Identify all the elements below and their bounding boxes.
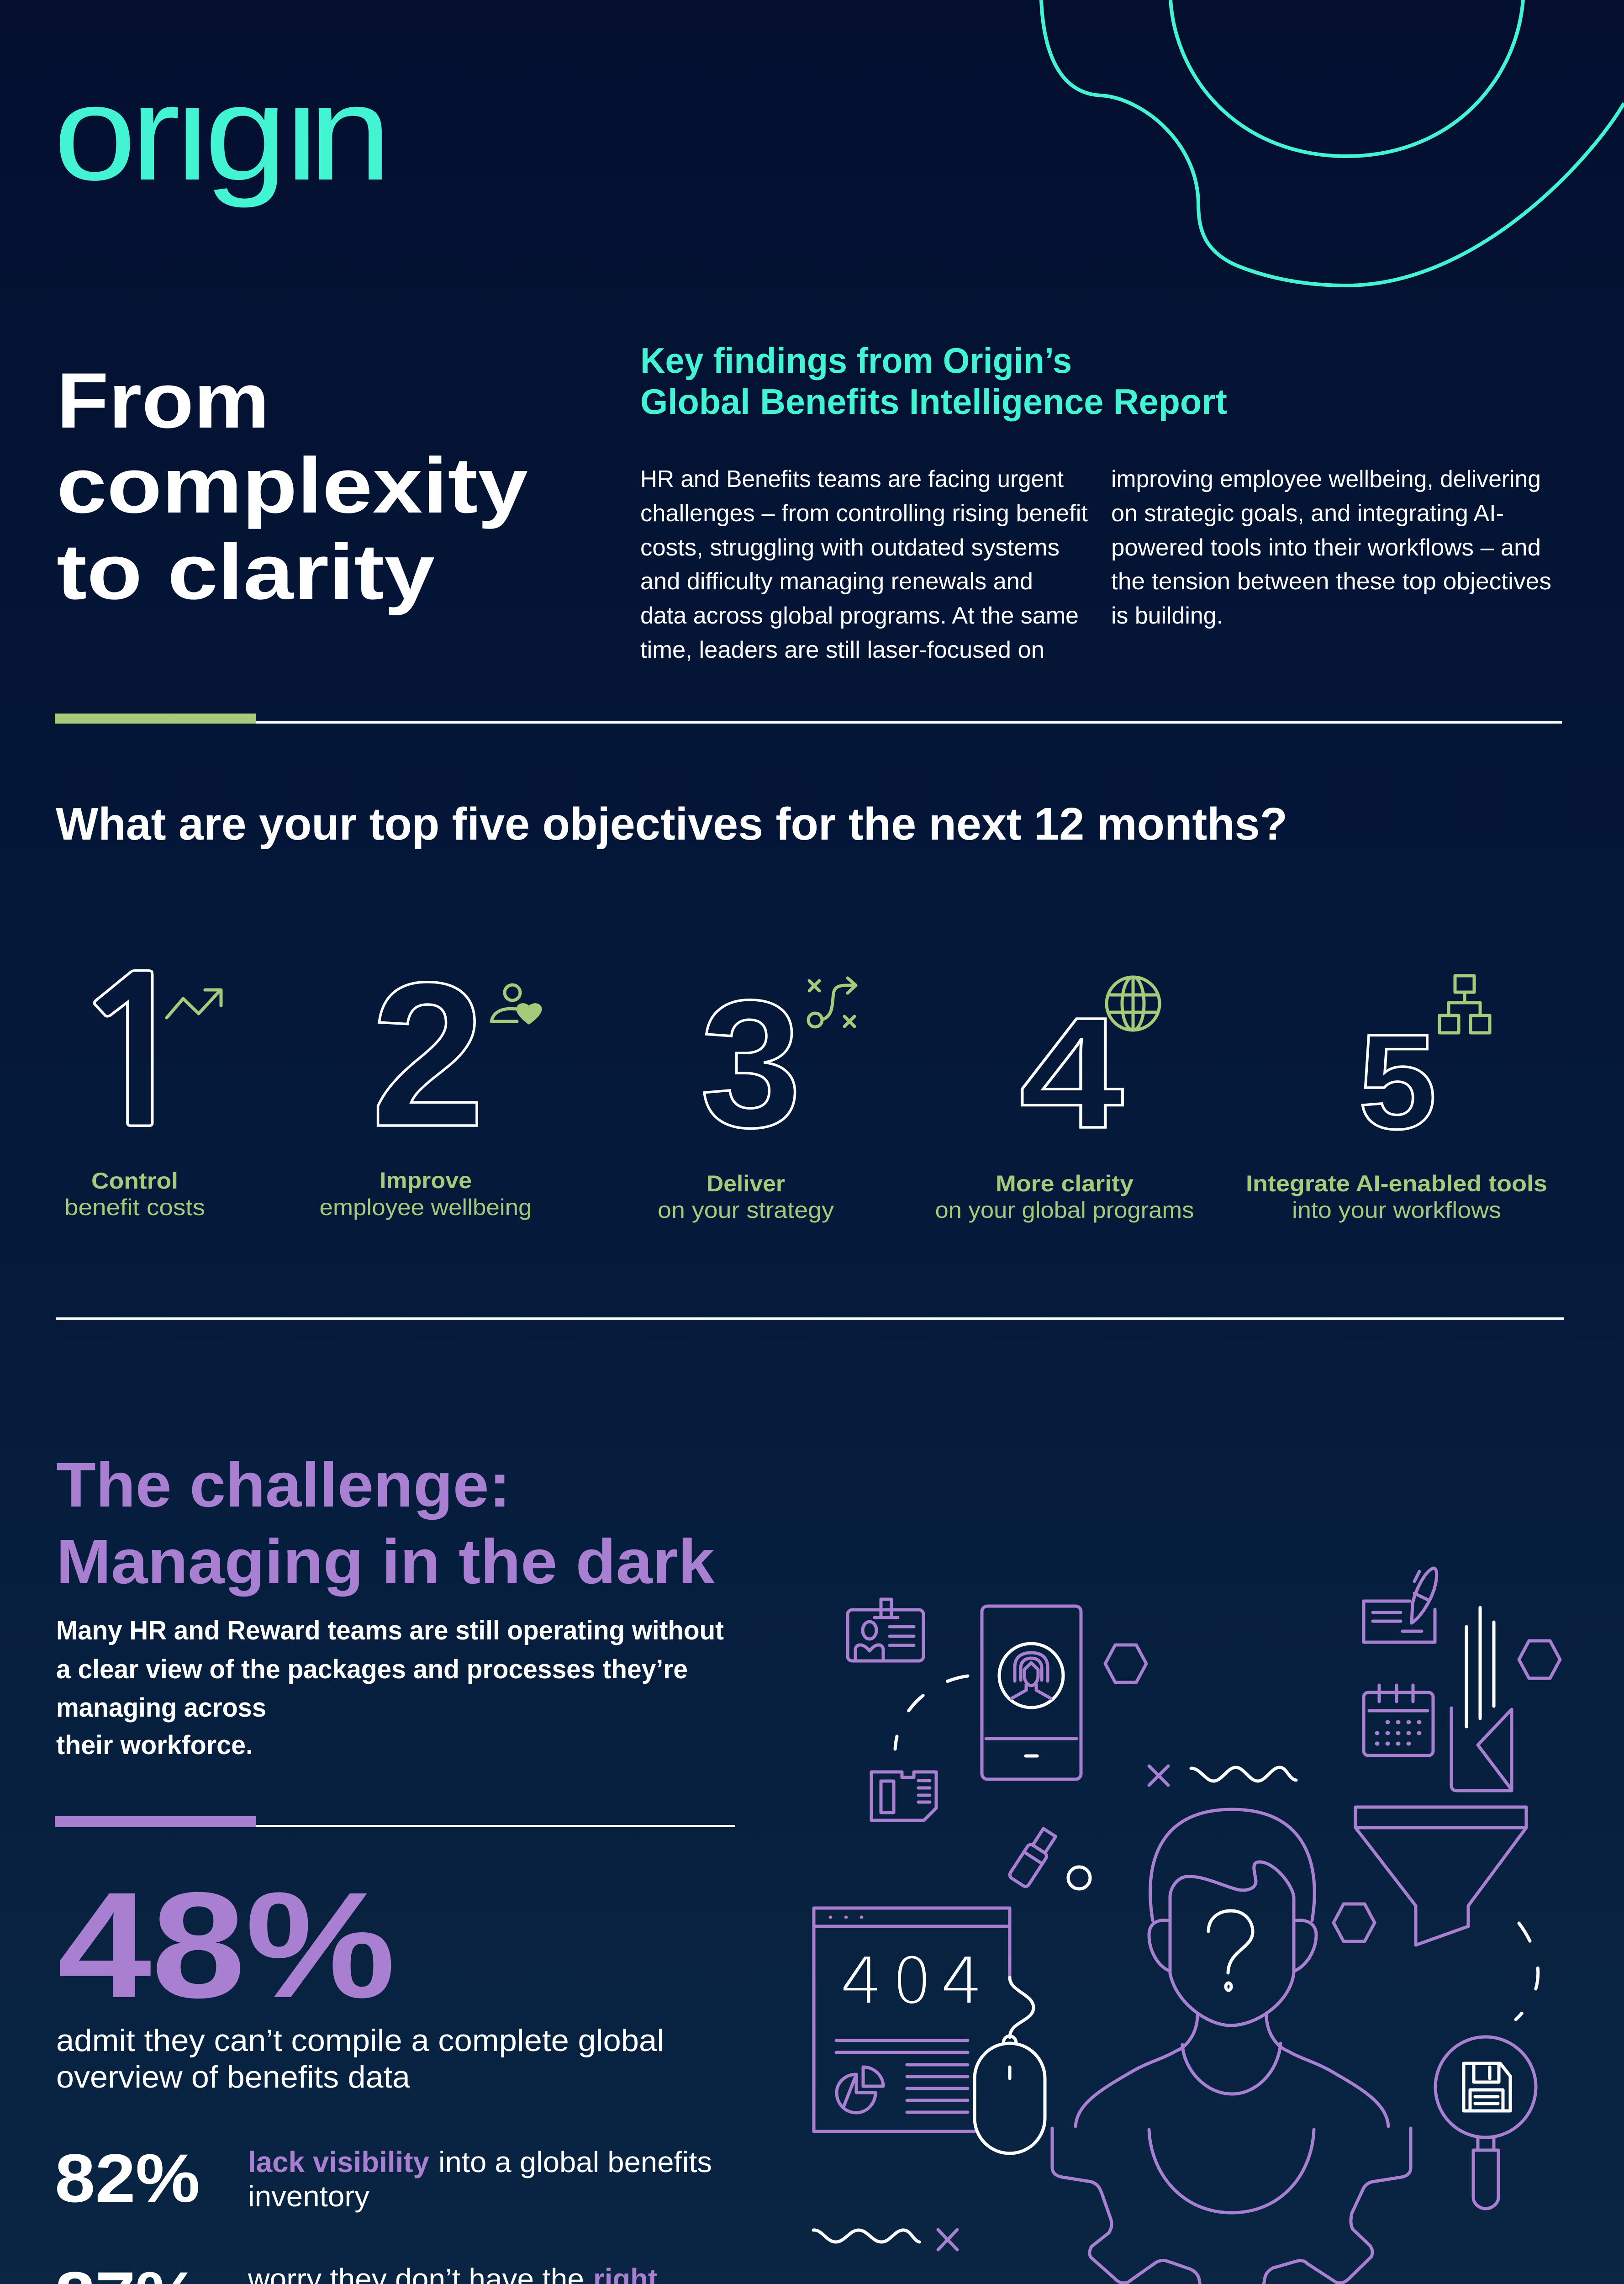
label: on your global programs — [935, 1197, 1194, 1223]
stat caption: lack visibility — [248, 2146, 429, 2178]
icon: ID badge — [848, 1599, 923, 1661]
subtitle: key findings — [640, 340, 1227, 422]
icon: person with heart — [491, 985, 540, 1023]
icon: envelope — [1451, 1708, 1512, 1791]
title: complexity — [57, 442, 528, 529]
hair — [1150, 1809, 1314, 1920]
stat: 82%: 82% — [55, 2140, 200, 2216]
stat: 87% — [55, 2258, 658, 2284]
intro text column 2 — [1111, 466, 1551, 629]
gear — [1052, 2128, 1411, 2284]
label: More clarity — [996, 1171, 1134, 1196]
stat: 48% — [56, 1861, 664, 2094]
label: Control — [91, 1168, 178, 1194]
icon: phone with profile — [982, 1606, 1081, 1779]
objective 5 — [1246, 976, 1547, 1223]
decorative teal curves — [1041, 0, 1624, 286]
icon: browser window with 404 — [814, 1908, 1010, 2131]
label: employee wellbeing — [320, 1195, 532, 1220]
challenge intro text: managing across — [56, 1693, 266, 1723]
icon: hexagon — [1334, 1904, 1375, 1941]
dashed arc — [895, 1676, 968, 1749]
title: From — [57, 357, 269, 444]
label — [320, 1168, 532, 1220]
label — [1246, 1171, 1547, 1223]
label: benefit costs — [64, 1195, 205, 1220]
intro text column 1: HR and Benefits teams are facing urgent — [640, 466, 1064, 492]
intro text column 1: time, leaders are still laser-focused on — [640, 637, 1044, 663]
stat caption — [56, 2023, 664, 2094]
title — [57, 357, 528, 616]
label — [64, 1168, 205, 1220]
person with question mark — [1052, 1809, 1411, 2284]
error code: 4 — [840, 1944, 882, 2018]
label: on your strategy — [658, 1197, 834, 1223]
icon: wave and cross — [813, 2230, 957, 2250]
icon: USB stick — [1008, 1827, 1059, 1888]
label: Improve — [380, 1168, 472, 1193]
icon: hexagon — [1519, 1641, 1560, 1678]
intro text column 1 — [640, 466, 1088, 663]
icon: funnel — [1355, 1807, 1526, 1945]
icon: magnifier with floppy disk — [1435, 2037, 1536, 2209]
label: Deliver — [707, 1171, 785, 1196]
stat caption: inventory — [248, 2180, 369, 2213]
icon: notepad and pen — [1364, 1568, 1437, 1642]
numeral 1: 1 — [65, 953, 205, 1156]
icon: mouse with cable — [975, 1977, 1045, 2153]
numeral 2: 2 — [371, 940, 485, 1169]
objective 2 — [320, 940, 540, 1220]
neck and shoulders — [1076, 2015, 1388, 2126]
label — [935, 1171, 1194, 1223]
icon: calendar — [1364, 1685, 1433, 1755]
stat caption: overview of benefits data — [56, 2060, 410, 2094]
icon: org chart — [1439, 976, 1490, 1033]
stat: 48%: 48% — [58, 1861, 395, 2029]
error code: 4 — [941, 1944, 983, 2018]
objective 3 — [658, 963, 856, 1223]
numeral 5: 5 — [1358, 1006, 1437, 1157]
dashed arc — [1516, 1923, 1538, 2020]
challenge intro text — [56, 1616, 724, 1760]
icon: cross and wave — [1149, 1766, 1296, 1785]
question mark — [1208, 1911, 1253, 1990]
error code — [840, 1944, 983, 2018]
intro text column 2: powered tools into their workflows – and — [1111, 534, 1541, 561]
stat caption: admit they can’t compile a complete global — [56, 2023, 664, 2058]
label: into your workflows — [1292, 1197, 1501, 1223]
heading: the challenge: The challenge: — [56, 1450, 511, 1520]
numeral 4: 4 — [1019, 985, 1125, 1161]
intro text column 1: costs, struggling with outdated systems — [640, 534, 1060, 561]
intro text column 1: challenges – from controlling rising benefit — [640, 500, 1088, 527]
error code: 0 — [892, 1944, 932, 2018]
torso — [1149, 2130, 1314, 2213]
logo: origin: origin — [53, 57, 391, 209]
stat: 82% — [55, 2140, 712, 2216]
label: Integrate AI-enabled tools — [1246, 1171, 1547, 1196]
heading: the challenge: Managing in the dark — [56, 1527, 715, 1597]
face — [1170, 1862, 1294, 2025]
stat caption — [248, 2146, 712, 2213]
icon: trend arrow — [167, 990, 221, 1018]
title: to clarity — [57, 528, 435, 616]
intro text column 2: the tension between these top objectives — [1111, 568, 1551, 595]
stat caption: into a global benefits — [438, 2146, 712, 2178]
numeral 3: 3 — [700, 963, 801, 1165]
icon: hexagon — [1105, 1645, 1146, 1682]
challenge intro text: their workforce. — [56, 1730, 253, 1760]
label — [658, 1171, 834, 1223]
icon: strategy path — [808, 978, 856, 1027]
challenge intro text: Many HR and Reward teams are still operating without — [56, 1616, 724, 1645]
collar — [1182, 2043, 1281, 2094]
objective 1 — [64, 953, 221, 1220]
subtitle: key findings: Key findings from Origin’s — [640, 340, 1072, 381]
subtitle: key findings: Global Benefits Intelligence Report — [640, 381, 1227, 422]
heading: the challenge — [56, 1450, 715, 1597]
icon: SD card — [871, 1772, 936, 1820]
objective 4 — [935, 977, 1194, 1223]
illustration: managing in the dark — [813, 1568, 1560, 2284]
challenge intro text: a clear view of the packages and processes they’re — [56, 1655, 688, 1684]
speed lines — [1466, 1607, 1494, 1727]
intro text column 1: and difficulty managing renewals and — [640, 568, 1033, 595]
intro text column 2: improving employee wellbeing, delivering — [1111, 466, 1541, 492]
intro text column 2: on strategic goals, and integrating AI- — [1111, 500, 1504, 527]
small circle — [1068, 1867, 1090, 1889]
intro text column 2: is building. — [1111, 603, 1223, 629]
heading: top five objectives: What are your top five objectives for the next 12 months? — [56, 798, 1287, 850]
icon: globe — [1107, 977, 1160, 1030]
intro text column 1: data across global programs. At the same — [640, 603, 1079, 629]
ears — [1149, 1920, 1316, 1971]
